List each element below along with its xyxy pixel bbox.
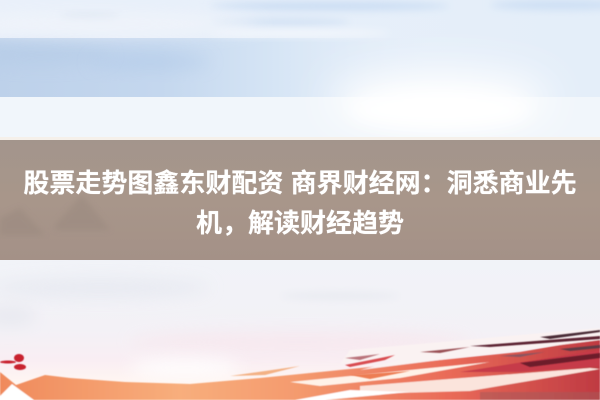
title text: 机，解读财经趋势 [196, 208, 404, 238]
upper sky: blue cloud bank [0, 0, 600, 140]
lower sky: grey haze [0, 278, 470, 378]
title text [23, 168, 577, 238]
decorative misty mountains [0, 140, 600, 260]
orange sunset strip [0, 328, 600, 400]
title band [0, 140, 600, 260]
dark red brush marks at right [230, 330, 600, 379]
red splatter at left [0, 354, 26, 370]
title text: 股票走势图鑫东财配资 商界财经网：洞悉商业先 [23, 168, 577, 198]
